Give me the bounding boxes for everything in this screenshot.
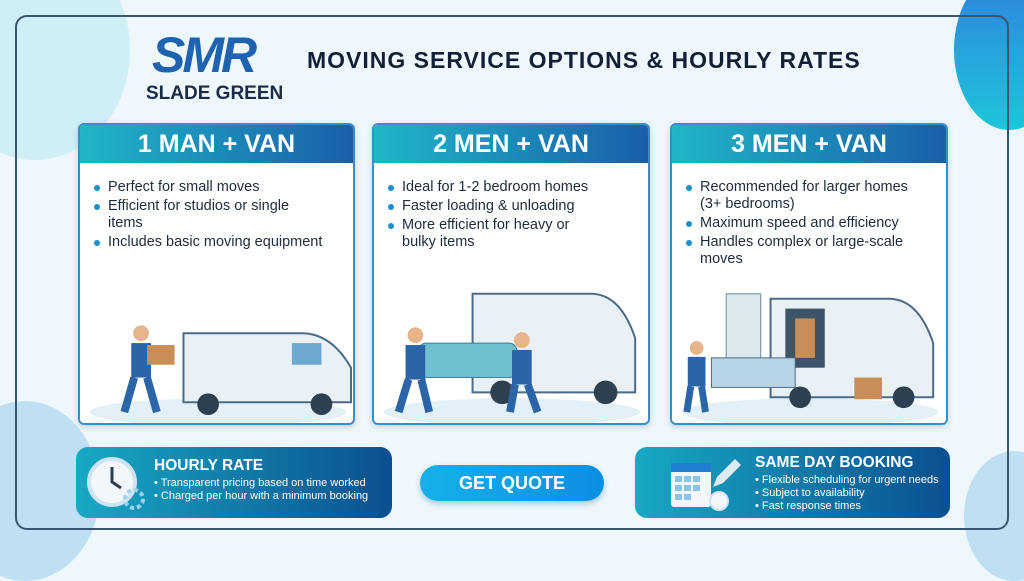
info box: hourly rate <box>76 447 392 518</box>
panel: 3 men + van: Maximum speed and efficiency <box>700 215 899 231</box>
info box: same day booking: SAME DAY BOOKING <box>755 454 913 471</box>
background blob right <box>954 0 1024 130</box>
panel: 3 men + van: Recommended for larger homes <box>700 179 908 195</box>
background blob left <box>0 0 130 160</box>
panel: 1 man + van: Efficient for studios or single <box>108 198 289 214</box>
illustration: bed, wardrobe, van <box>682 293 938 423</box>
illustration: sofa and van <box>384 292 640 423</box>
panel: 1 man + van: Includes basic moving equipment <box>108 234 322 250</box>
logo <box>146 27 283 104</box>
panel: 1 man + van: Perfect for small moves <box>108 179 260 195</box>
info box: same day booking: • Subject to availability <box>755 487 865 499</box>
info box: same day booking <box>635 447 950 518</box>
panel: 2 men + van: Ideal for 1-2 bedroom homes <box>402 179 588 195</box>
button: get quote: GET QUOTE <box>459 473 565 493</box>
panel: 2 men + van: 2 MEN + VAN <box>433 130 589 158</box>
panel: 1 man + van: 1 MAN + VAN <box>138 130 295 158</box>
illustration: van and mover <box>90 325 352 423</box>
info box: same day booking: • Flexible scheduling for urgent needs <box>755 474 939 486</box>
panel: 2 men + van: Faster loading & unloading <box>402 198 575 214</box>
info box: hourly rate: HOURLY RATE <box>154 457 263 474</box>
title: MOVING SERVICE OPTIONS & HOURLY RATES <box>307 47 861 73</box>
panel: 3 men + van <box>670 123 948 425</box>
panel: 2 men + van: More efficient for heavy or <box>402 217 569 233</box>
icon: clock <box>87 457 145 510</box>
button: get quote <box>420 465 604 501</box>
logo: SMR <box>152 27 254 83</box>
info box: same day booking: • Fast response times <box>755 500 861 512</box>
panel: 3 men + van: moves <box>700 251 743 267</box>
panel: 1 man + van: items <box>108 215 143 231</box>
icon: calendar with rocket <box>671 459 741 511</box>
info box: hourly rate: • Charged per hour with a minimum booking <box>154 490 368 502</box>
panel: 3 men + van: Handles complex or large-scale <box>700 234 903 250</box>
logo: SLADE GREEN <box>146 83 283 104</box>
info box: hourly rate: • Transparent pricing based on time worked <box>154 477 366 489</box>
panel: 2 men + van: bulky items <box>402 234 475 250</box>
panel: 3 men + van: (3+ bedrooms) <box>700 196 795 212</box>
panel: 2 men + van <box>372 123 650 425</box>
panel: 1 man + van <box>78 123 355 425</box>
panel: 3 men + van: 3 MEN + VAN <box>731 130 887 158</box>
